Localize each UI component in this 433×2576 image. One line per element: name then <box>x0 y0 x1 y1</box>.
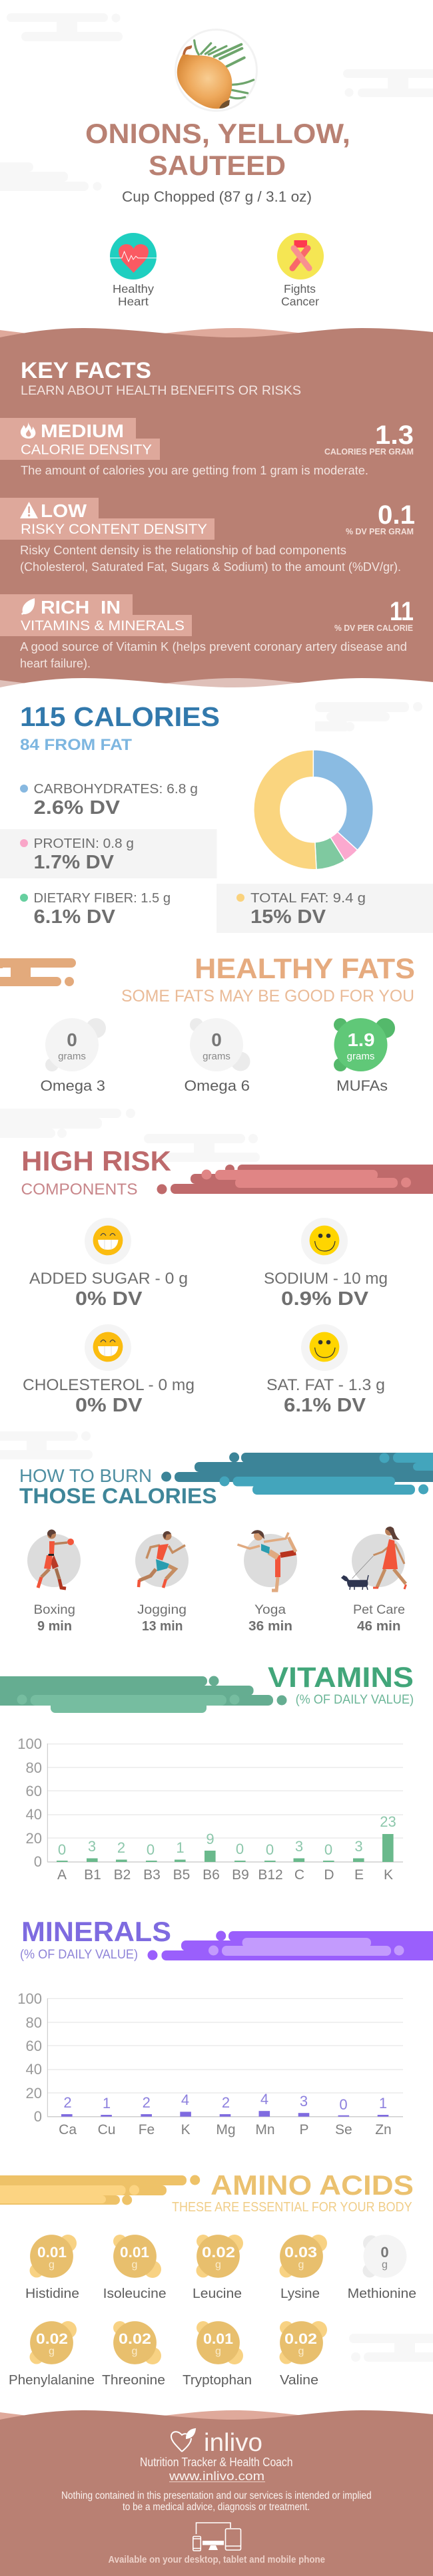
bar chart: vitamins: 0 <box>324 1841 332 1858</box>
bar chart: vitamins: 0 <box>58 1841 66 1858</box>
website: www.inlivo.com <box>169 2470 264 2483</box>
bar chart: vitamins: B9 <box>232 1867 249 1883</box>
amino: tryptophan <box>183 2321 252 2388</box>
bar chart: vitamins: D <box>324 1867 334 1883</box>
donut chart <box>254 750 373 870</box>
icon: fights cancer: Fights <box>284 282 316 295</box>
bar chart: minerals: 2 <box>63 2094 72 2111</box>
amino: lysine <box>280 2235 327 2301</box>
stat: omega 6: 0 <box>211 1029 222 1050</box>
risk item: cholesterol <box>23 1324 195 1416</box>
activity: jogging: Jogging <box>137 1603 187 1617</box>
amino: lysine: 0.03 <box>284 2244 317 2261</box>
heading: healthy fats: SOME FATS MAY BE GOOD FOR YOU <box>121 987 414 1006</box>
risk item: added sugar: 0% DV <box>75 1288 143 1310</box>
bar chart: vitamins: 9 <box>206 1831 215 1847</box>
amino: valine: 0.02 <box>284 2330 317 2347</box>
amino: phenylalanine: 0.02 <box>36 2330 68 2347</box>
risk item: cholesterol: CHOLESTEROL - 0 mg <box>23 1376 195 1394</box>
activity: boxing <box>27 1529 81 1634</box>
bar chart: vitamins: B3 <box>143 1867 161 1883</box>
bar chart: vitamins: B6 <box>203 1867 220 1883</box>
title: ONIONS, YELLOW, <box>85 118 350 149</box>
activity: pet care: Pet Care <box>353 1603 405 1617</box>
logo icon <box>171 2429 195 2452</box>
heading: how to burn those calories <box>19 1465 217 1508</box>
stat: mufas <box>334 1018 395 1094</box>
bar chart: minerals: Ca <box>59 2122 77 2137</box>
bar chart: minerals: 60 <box>26 2038 42 2054</box>
banner: healthy fats <box>0 958 76 986</box>
bar chart: minerals: Cu <box>98 2122 115 2137</box>
fact: calorie density: CALORIES PER GRAM <box>324 447 414 457</box>
bar chart: vitamins: 3 <box>354 1838 363 1855</box>
legend: protein <box>0 829 217 878</box>
bar chart: vitamins: 0 <box>236 1841 244 1857</box>
stat: omega 3: Omega 3 <box>40 1077 105 1094</box>
amino: valine: Valine <box>280 2373 318 2388</box>
heading: vitamins <box>268 1662 414 1707</box>
amino: phenylalanine <box>9 2321 95 2388</box>
amino: methionine: Methionine <box>348 2287 416 2301</box>
fact: calorie density: The amount of calories you are getting from 1 gram is moderate. <box>21 464 368 477</box>
amino: tryptophan: 0.01 <box>203 2330 233 2347</box>
bar chart: minerals: Mn <box>255 2122 275 2137</box>
bar chart: minerals: 100 <box>17 1990 42 2007</box>
disclaimer <box>61 2490 372 2513</box>
stat: omega 6: grams <box>203 1051 230 1062</box>
icon: devices <box>193 2523 241 2551</box>
amino: phenylalanine: Phenylalanine <box>9 2373 95 2388</box>
banner: vitamins <box>0 1676 286 1713</box>
icon: healthy heart: Heart <box>118 295 149 308</box>
activity: yoga: 36 min <box>248 1619 292 1634</box>
fact: risky content density <box>0 498 415 574</box>
title: SAUTEED <box>149 150 286 181</box>
bar chart: minerals: 0 <box>339 2096 348 2113</box>
disclaimer: to be a medical advice, diagnosis or treatment. <box>123 2501 310 2513</box>
bar chart: vitamins: B1 <box>84 1867 101 1883</box>
fact: risky content density: % DV PER GRAM <box>346 527 414 536</box>
fact: vitamins and minerals <box>0 594 414 670</box>
risk item: saturated fat: SAT. FAT - 1.3 g <box>266 1376 385 1394</box>
bar chart: minerals: 4 <box>260 2091 268 2108</box>
activity: pet care <box>342 1527 406 1634</box>
heading: calories <box>20 701 220 754</box>
amino: leucine: g <box>215 2259 221 2271</box>
bar chart: vitamins: 80 <box>26 1759 42 1776</box>
banner: burn calories <box>161 1452 433 1495</box>
bar chart: vitamins: 100 <box>17 1736 42 1752</box>
legend: dietary fiber: DIETARY FIBER: 1.5 g <box>33 891 171 906</box>
heading: how to burn those calories: THOSE CALORIES <box>19 1484 217 1508</box>
fact: vitamins and minerals: RICH IN <box>41 597 121 618</box>
legend: carbohydrates <box>20 782 198 819</box>
stat: omega 3: 0 <box>67 1029 77 1050</box>
stat: omega 3: grams <box>58 1051 86 1062</box>
banner: high risk <box>157 1165 433 1194</box>
bar chart: vitamins: A <box>57 1867 67 1883</box>
icon: fights cancer: Cancer <box>281 295 319 308</box>
amino: histidine <box>25 2235 79 2301</box>
bar chart: vitamins: 2 <box>117 1839 125 1856</box>
bar chart: vitamins: B12 <box>258 1867 283 1883</box>
bar chart: minerals: 1 <box>103 2095 111 2112</box>
risk item: cholesterol: 0% DV <box>75 1395 143 1416</box>
fact: risky content density: (Cholesterol, Saturated Fat, Sugars & Sodium) to the amount (%DV/gr). <box>20 560 401 574</box>
bar chart: minerals: 3 <box>300 2093 308 2110</box>
amino: methionine <box>348 2235 416 2301</box>
legend: total fat: TOTAL FAT: 9.4 g <box>250 891 366 906</box>
amino: isoleucine: Isoleucine <box>103 2287 167 2301</box>
stat: omega 6 <box>184 1018 250 1094</box>
amino: threonine: 0.02 <box>119 2330 151 2347</box>
bar chart: vitamins: 20 <box>26 1830 42 1847</box>
fact: calorie density: CALORIE DENSITY <box>21 442 152 458</box>
legend: carbohydrates: CARBOHYDRATES: 6.8 g <box>33 782 198 797</box>
heading: key facts: KEY FACTS <box>21 358 151 383</box>
risk item: saturated fat <box>266 1324 385 1416</box>
logo wordmark: inlivo <box>204 2429 262 2457</box>
heading: calories: 84 FROM FAT <box>20 736 132 754</box>
amino: histidine: Histidine <box>25 2287 79 2301</box>
fact: risky content density: Risky Content density is the relationship of bad components <box>20 544 346 557</box>
fact: vitamins and minerals: heart failure). <box>20 657 91 670</box>
icon: healthy heart <box>110 233 157 308</box>
food image: onion <box>176 29 257 110</box>
amino: threonine: g <box>132 2346 137 2357</box>
heading: amino acids: AMINO ACIDS <box>211 2169 414 2201</box>
heading: vitamins: (% OF DAILY VALUE) <box>296 1692 414 1707</box>
bar chart: vitamins: 3 <box>295 1838 303 1855</box>
amino: methionine: g <box>382 2259 388 2271</box>
bar chart: vitamins: 0 <box>147 1841 155 1858</box>
amino: histidine: 0.01 <box>37 2244 67 2261</box>
bar chart: minerals: Se <box>335 2122 352 2137</box>
bar chart: vitamins: 23 <box>380 1813 396 1830</box>
bar chart: minerals: K <box>181 2122 191 2137</box>
amino: isoleucine: 0.01 <box>120 2244 149 2261</box>
icon: fights cancer <box>277 233 324 308</box>
fact: vitamins and minerals: VITAMINS & MINERALS <box>21 618 185 634</box>
heading: minerals: MINERALS <box>21 1916 171 1947</box>
bar chart: vitamins: E <box>354 1867 364 1883</box>
bar chart: minerals: Fe <box>139 2122 155 2137</box>
activity: pet care: 46 min <box>357 1619 401 1634</box>
bar chart: minerals: 4 <box>181 2092 189 2108</box>
disclaimer: Nothing contained in this presentation and our services is intended or implied <box>61 2490 372 2501</box>
amino: threonine: Threonine <box>102 2373 165 2388</box>
fact: vitamins and minerals: 11 <box>390 597 414 626</box>
availability note: Available on your desktop, tablet and mobile phone <box>108 2554 325 2565</box>
bar chart: vitamins <box>17 1736 403 1883</box>
stat: mufas: MUFAs <box>336 1077 388 1094</box>
fact: calorie density: 1.3 <box>375 421 414 450</box>
stat: mufas: grams <box>347 1051 374 1062</box>
stat: mufas: 1.9 <box>348 1029 374 1050</box>
bar chart: minerals: 80 <box>26 2014 42 2031</box>
amino: lysine: Lysine <box>280 2287 320 2301</box>
banner: amino acids <box>0 2175 200 2205</box>
heading: high risk: HIGH RISK <box>21 1145 171 1177</box>
heading: amino acids <box>172 2169 414 2215</box>
bar chart: minerals: 0 <box>34 2108 42 2125</box>
legend: dietary fiber <box>20 891 171 928</box>
fact: vitamins and minerals: A good source of Vitamin K (helps prevent coronary artery disease and <box>20 640 407 653</box>
bar chart: vitamins: K <box>384 1867 393 1883</box>
activity: yoga <box>237 1530 297 1634</box>
legend: total fat <box>217 884 433 933</box>
bar chart: vitamins: 0 <box>266 1841 274 1858</box>
icon: healthy heart: Healthy <box>113 282 154 295</box>
fact: vitamins and minerals: % DV PER CALORIE <box>334 624 413 633</box>
bar chart: minerals: P <box>299 2122 309 2137</box>
heading: how to burn those calories: HOW TO BURN <box>19 1465 152 1486</box>
amino: phenylalanine: g <box>49 2346 55 2357</box>
stat: omega 3 <box>40 1018 106 1094</box>
bar chart: minerals: 40 <box>26 2061 42 2078</box>
title <box>85 118 350 181</box>
activity: yoga: Yoga <box>254 1603 286 1617</box>
amino: leucine: Leucine <box>193 2287 242 2301</box>
bar chart: vitamins: 0 <box>34 1853 42 1870</box>
stat: omega 6: Omega 6 <box>184 1077 250 1094</box>
risk item: sodium: 0.9% DV <box>281 1288 369 1310</box>
legend: total fat: 15% DV <box>250 906 326 928</box>
heading: calories: 115 CALORIES <box>20 701 220 732</box>
amino: methionine: 0 <box>380 2244 389 2261</box>
amino: lysine: g <box>298 2259 304 2271</box>
bar chart: minerals: 20 <box>26 2085 42 2102</box>
heading: minerals: (% OF DAILY VALUE) <box>20 1947 138 1962</box>
legend: protein: PROTEIN: 0.8 g <box>33 836 134 851</box>
bar chart: minerals <box>17 1990 403 2137</box>
footer <box>0 2410 433 2576</box>
amino: isoleucine: g <box>132 2259 137 2271</box>
heading: high risk: COMPONENTS <box>21 1181 137 1198</box>
risk item: added sugar <box>29 1218 188 1310</box>
serving size: Cup Chopped (87 g / 3.1 oz) <box>122 188 312 205</box>
risk item: sodium: SODIUM - 10 mg <box>264 1270 388 1288</box>
bar chart: vitamins: 3 <box>88 1838 96 1855</box>
legend: carbohydrates: 2.6% DV <box>33 797 121 819</box>
fact: calorie density <box>0 418 414 477</box>
subheading: LEARN ABOUT HEALTH BENEFITS OR RISKS <box>21 384 301 398</box>
bar chart: vitamins: 40 <box>26 1806 42 1823</box>
risk item: sodium <box>264 1218 388 1310</box>
tagline: Nutrition Tracker & Health Coach <box>140 2456 293 2469</box>
fact: risky content density: RISKY CONTENT DENSITY <box>21 521 207 537</box>
amino: leucine <box>193 2235 243 2301</box>
activity: jogging <box>135 1531 189 1634</box>
bar chart: vitamins: 60 <box>26 1783 42 1799</box>
bar chart: vitamins: C <box>294 1867 304 1883</box>
panel: key facts <box>0 328 433 705</box>
bar chart: minerals: Zn <box>375 2122 392 2137</box>
risk item: added sugar: ADDED SUGAR - 0 g <box>29 1270 188 1288</box>
bar chart: vitamins: B2 <box>114 1867 131 1883</box>
activity: boxing: 9 min <box>37 1619 72 1634</box>
fact: calorie density: MEDIUM <box>41 421 124 441</box>
legend: protein: 1.7% DV <box>33 852 115 873</box>
bar chart: minerals: 2 <box>143 2094 151 2111</box>
amino: tryptophan: g <box>215 2346 221 2357</box>
heading: healthy fats <box>121 953 415 1006</box>
fact: risky content density: LOW <box>41 500 87 521</box>
amino: valine: g <box>298 2346 304 2357</box>
banner: minerals <box>148 1931 433 1960</box>
bar chart: vitamins: B5 <box>173 1867 190 1883</box>
heading: high risk <box>21 1145 171 1198</box>
amino: valine <box>280 2321 327 2388</box>
legend: dietary fiber: 6.1% DV <box>33 906 116 928</box>
amino: leucine: 0.02 <box>202 2244 235 2261</box>
activity: boxing: Boxing <box>33 1603 75 1617</box>
amino: tryptophan: Tryptophan <box>183 2373 252 2388</box>
risk item: saturated fat: 6.1% DV <box>284 1395 366 1416</box>
amino: threonine <box>102 2321 165 2388</box>
heading: vitamins: VITAMINS <box>268 1662 414 1694</box>
heading: healthy fats: HEALTHY FATS <box>195 953 415 985</box>
activity: jogging: 13 min <box>142 1619 183 1634</box>
amino: histidine: g <box>49 2259 55 2271</box>
fact: risky content density: 0.1 <box>378 500 415 530</box>
heading: minerals <box>20 1916 171 1962</box>
amino: isoleucine <box>103 2235 167 2301</box>
bar chart: vitamins: 1 <box>176 1839 185 1856</box>
bar chart: minerals: 2 <box>222 2094 230 2111</box>
bar chart: minerals: Mg <box>216 2122 236 2137</box>
heading: amino acids: THESE ARE ESSENTIAL FOR YOUR BODY <box>172 2200 412 2215</box>
bar chart: minerals: 1 <box>379 2095 387 2112</box>
